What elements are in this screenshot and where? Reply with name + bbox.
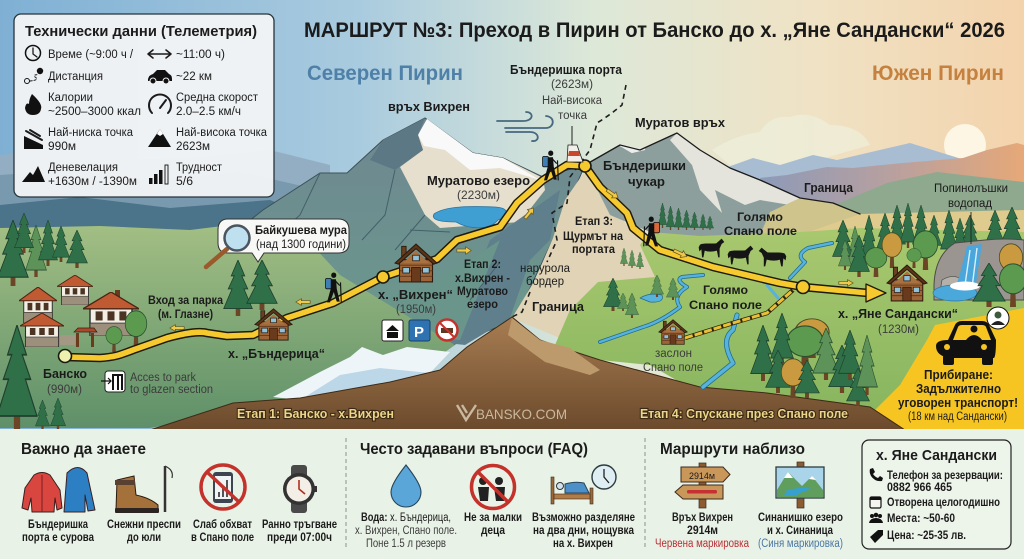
horses [699,239,786,266]
caption: water: х. Вихрен, Спано поле. [355,525,457,537]
label: нарурола бордер: бордер [526,276,564,288]
icon: pass marker [567,126,583,162]
label: Муратов връх: Муратов връх [635,116,725,130]
telemetry: calories and speed: 2.0–2.5 км/ч [176,106,241,118]
brown foreground ridge [150,317,905,430]
telemetry: lowest and highest point: Най-висока точка [176,127,268,139]
village Bansko [19,275,147,352]
caption: snow: до юли [127,532,161,544]
icon: transport car [936,307,1009,365]
label: Етап 2: х.Вихрен - [455,273,510,285]
distant mountains [0,143,1024,260]
icon: wind [497,112,553,141]
label: Етап 3 [563,216,624,256]
label: Попинолъшки водопад [934,183,1008,210]
side trail to shelter [685,290,793,338]
caption: Vihren route: Червена маркировка [655,538,750,550]
telemetry: lowest and highest point [24,127,268,153]
hikers [326,150,660,302]
contact: phone: 0882 966 465 [887,482,953,494]
icon: no small children [472,466,514,508]
icons: hut services: P [414,324,424,341]
label: Етап 3: портата [572,244,616,256]
icon: lake picture [776,462,824,508]
label: заслон Спано поле: заслон [655,348,692,360]
caption: children: Не за малки [464,512,522,524]
mountain: Muratov [585,133,860,238]
telemetry: time: Време (~9:00 ч / [48,49,134,61]
route line [65,165,886,358]
caption: two days [532,512,635,550]
label: Голямо Спано поле upper: Голямо [737,212,783,224]
callout: transport note: уговорен транспорт! [898,396,1018,410]
icon: jackets [22,468,95,512]
icon: park access [101,371,125,392]
icons: hut services [382,320,458,341]
heading: Южен Пирин: Южен Пирин [872,62,1004,85]
label: Етап 2 [455,259,510,311]
panel: bottom background [0,429,1024,559]
label: Попинолъшки водопад: Попинолъшки [934,183,1008,195]
label: Етап 2: Муратово [457,286,508,298]
icon: watch [283,465,317,513]
telemetry: elevation and difficulty: Деневелация [48,162,118,174]
caption: signal: в Спано поле [191,532,254,544]
route waypoints [58,160,810,362]
mountain: Vihren [225,118,585,350]
trees: left forest [0,213,277,430]
label: х. Вихрен [378,288,453,316]
green valley [555,228,1024,428]
label: х. Вихрен: (1950м) [396,304,436,316]
telemetry: calories and speed: ~2500–3000 ккал [48,106,141,118]
label: Вход за парка: Вход за парка [148,295,224,307]
icon: signpost [675,463,730,508]
caption: jackets: порта е сурова [22,532,94,544]
trees: valley [604,203,877,406]
green foothills left [0,222,455,428]
label: Acces to park: Acces to park [130,372,196,384]
telemetry: lowest and highest point: Най-ниска точка [48,127,134,139]
caption: signal [191,519,254,544]
caption: Vihren route: Връх Вихрен [672,512,733,524]
telemetry: calories and speed: Калории [48,92,93,104]
label: Етап 3: Щурмът на [563,231,624,243]
panel: telemetry [14,14,274,197]
telemetry heading: Технически данни (Телеметрия) [25,23,257,40]
label: Бъндеришка порта: точка [558,110,588,122]
contact: price [870,530,966,543]
label: Попинолъшки водопад: водопад [948,198,992,210]
callout: transport note: Прибиране: [924,368,993,382]
icon: water drop [391,465,421,507]
label: Бъндеришка порта: (2623м) [551,79,593,91]
tan meadow [640,200,1024,270]
icon: signpost: 2914м [689,471,715,482]
label: Acces to park: to glazen section [130,384,213,396]
caption: Sinanitsa route: Синанишко езеро [758,512,843,524]
label: Вход за парка [148,295,224,321]
route direction arrows [170,187,853,331]
background sky [0,0,1024,430]
caption: signal: Слаб обхват [193,519,252,531]
panel: FAQ [355,441,635,550]
caption: Vihren route [655,512,750,550]
telemetry: elevation and difficulty: Трудност [176,162,223,174]
telemetry: calories and speed: Средна скорост [176,92,259,104]
caption: children: деца [481,525,506,537]
caption: water: Поне 1.5 л резерв [366,538,446,550]
label: Бъндеришки чукар [603,159,686,189]
trees: right forest [833,203,1023,277]
caption: early start: преди 07:00ч [267,532,332,544]
heading: important: Важно да знаете [21,441,146,458]
caption: early start: Ранно тръгване [262,519,337,531]
caption: early start [262,519,337,544]
label: х. Яне Сандански: (1230м) [878,324,919,336]
telemetry: distance [24,68,212,84]
label: заслон Спано поле: Спано поле [643,362,703,374]
label: Голямо Спано поле lower: Голямо [703,285,748,297]
label: Acces to park [130,372,213,396]
label: Бъндеришки чукар: Бъндеришки [603,159,686,173]
label: Бъндеришка порта: Най-висока [542,95,603,107]
label: Вход за парка: (м. Глазне) [158,309,213,321]
label: връх Вихрен: връх Вихрен [388,100,470,114]
telemetry: calories and speed [25,92,259,118]
label: заслон Спано поле [643,348,703,374]
telemetry: distance: ~22 км [176,71,212,83]
label: Муратово езеро: Муратово езеро [427,174,530,188]
contact heading: х. Яне Сандански [876,447,997,464]
caption: water: Вода: х. Бъндерица, [361,512,451,524]
huts [255,244,927,344]
callout: Байкушева мура: Байкушева мура [255,225,348,237]
icon: boot and pole [115,466,172,513]
contact: places [869,513,955,525]
label: Банско: Банско [43,367,87,381]
contact: phone [870,468,1003,494]
caption: jackets: Бъндеришка [28,519,88,531]
contact: places: Места: ~50-60 [887,513,955,525]
label: Граница right: Граница [804,181,854,195]
label: Бъндеришка порта: Бъндеришка порта [510,63,623,77]
central rock face [512,168,700,360]
icon: bed and clock [551,465,616,504]
label: Банско: (990м) [47,384,82,396]
telemetry: distance: Дистанция [48,71,103,83]
label: Муратово езеро: (2230м) [457,190,500,202]
telemetry: elevation and difficulty: +1630м / -1390м [48,176,137,188]
panel: nearby routes [655,441,843,550]
sun and clouds [712,115,986,166]
callout: Байкушева мура [206,219,349,267]
label: Голямо Спано поле upper: Спано поле [724,226,797,238]
telemetry: lowest and highest point: 2623м [176,141,210,153]
label: Граница centre: Граница [532,300,585,314]
callout: Байкушева мура: (над 1300 години) [256,239,346,251]
label: х. Яне Сандански: х. „Яне Сандански“ [838,307,958,321]
caption: Sinanitsa route [758,512,843,550]
label: Голямо Спано поле lower: Спано поле [689,300,762,312]
label: Бъндеришки чукар: чукар [628,175,665,189]
label: Голямо Спано поле upper [724,212,797,238]
callout: transport note [898,368,1018,423]
contact: open all year: Отворена целогодишно [887,497,1000,509]
lake: Muratovo [433,207,507,228]
label: Банско [43,367,87,396]
label: Етап 1: Етап 1: Банско - х.Вихрен [237,406,394,421]
label: х. Бъндерица: х. „Бъндерица“ [228,347,325,361]
heading: Северен Пирин: Северен Пирин [307,62,463,85]
label: Етап 2: Етап 2: [464,259,501,271]
caption: Sinanitsa route: (Синя маркировка) [758,538,843,550]
waterfall [933,212,1024,307]
label: Етап 2: езеро [467,299,498,311]
label: х. Вихрен: х. „Вихрен“ [378,288,453,302]
caption: Sinanitsa route: и х. Синаница [767,525,834,537]
watermark: BANSKO.COM [476,406,567,422]
panel: important to know [21,441,337,544]
caption: snow: Снежни преспи [107,519,181,531]
contact: phone: Телефон за резервации: [887,470,1003,482]
label: х. Яне Сандански [838,307,958,336]
caption: water [355,512,457,550]
telemetry: time [26,46,225,61]
rivers [600,243,832,387]
heading: nearby: Маршрути наблизо [660,441,805,458]
label: нарурола бордер: нарурола [520,263,571,275]
label: Голямо Спано поле lower [689,285,762,312]
icon: no signal [201,465,245,509]
label: Бъндеришка порта [510,63,623,122]
caption: snow [107,519,181,544]
caption: two days: Възможно разделяне [532,512,635,524]
label: нарурола бордер [520,263,571,288]
telemetry: elevation and difficulty: 5/6 [176,176,193,188]
caption: two days: на два дни, нощувка [533,525,635,537]
label: Етап 4: Етап 4: Спускане през Спано поле [640,406,848,421]
title: МАРШРУТ №3: Преход в Пирин от Банско до х. „Яне Сандански“ 2026 [304,19,1005,42]
heading: FAQ: Често задавани въпроси (FAQ) [360,441,588,458]
caption: jackets [22,519,94,544]
telemetry: elevation and difficulty [22,162,223,188]
contact: price: Цена: ~25-35 лв. [887,530,966,542]
panel: hut contacts [862,440,1011,549]
telemetry: lowest and highest point: 990м [48,141,76,153]
label: Етап 3: Етап 3: [575,216,613,228]
yellow transport area [855,308,1024,430]
callout: transport note: Задължително [916,382,1001,396]
caption: children [464,512,522,537]
border: dashed line [512,85,626,317]
caption: two days: на х. Вихрен [553,538,613,550]
caption: Vihren route: 2914м [687,525,718,537]
label: Муратово езеро [427,174,530,202]
telemetry: time: ~11:00 ч) [176,49,225,61]
snow patch [273,347,450,400]
